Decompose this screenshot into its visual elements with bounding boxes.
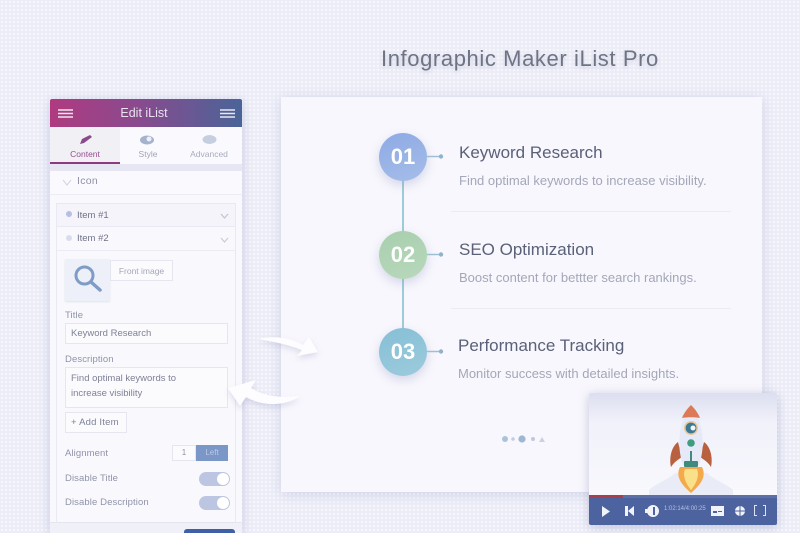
- chevron: [62, 180, 72, 186]
- editor title: Edit iList: [120, 106, 168, 120]
- description 02: Boost content for bettter search rankings.: [459, 270, 697, 285]
- toggle: [199, 472, 230, 486]
- icon: magnifier: [74, 266, 102, 292]
- add item button: + Add Item: [71, 417, 119, 428]
- connector dot 03: [427, 349, 444, 354]
- title field: Keyword Research: [71, 328, 151, 339]
- arrow: to editor: [228, 380, 296, 408]
- play icon: [602, 506, 610, 517]
- globe icon: [735, 506, 745, 516]
- menu icon right: [220, 109, 235, 118]
- time code: 1:02:14/4:00:25: [664, 506, 706, 512]
- description field: Find optimal keywords to: [71, 373, 176, 384]
- image thumbnail: [65, 259, 110, 301]
- rocket illustration: [649, 405, 733, 495]
- badge 02: [379, 231, 427, 279]
- alignment value: 1: [182, 448, 186, 457]
- skip icon: [625, 506, 634, 516]
- chevron: [220, 238, 228, 243]
- description label: Description: [65, 354, 114, 365]
- advanced label: Advanced: [190, 149, 228, 159]
- badge 01: [379, 133, 427, 181]
- chevron: [220, 214, 228, 219]
- front image button: Front image: [119, 266, 164, 276]
- style icon: [140, 136, 154, 144]
- item label: Item #1: [77, 210, 109, 221]
- badge 02: 02: [391, 242, 415, 267]
- step 03: [376, 328, 679, 384]
- controls bar: [589, 498, 777, 525]
- title: Infographic Maker iList Pro: [381, 46, 659, 71]
- panel: infographic preview: [281, 97, 762, 492]
- menu icon left: [58, 109, 73, 118]
- strip: [50, 164, 242, 171]
- content label: Content: [70, 149, 100, 159]
- tab: advanced: [190, 135, 228, 159]
- disable description label: Disable Description: [65, 497, 149, 508]
- heading 01: Keyword Research: [459, 143, 603, 162]
- volume icon: [645, 505, 659, 517]
- progress fill: [589, 495, 623, 499]
- tab: content: [50, 127, 120, 164]
- content icon: [80, 135, 92, 144]
- connector dot 02: [427, 252, 444, 257]
- tab: style: [139, 136, 158, 159]
- fullscreen icon: [754, 505, 766, 516]
- item 2 editor: [56, 226, 236, 533]
- alignment left button: [196, 445, 228, 461]
- alignment left button: Left: [205, 448, 219, 457]
- divider: [57, 250, 235, 251]
- description 03: Monitor success with detailed insights.: [458, 366, 679, 381]
- icon section: [50, 171, 242, 195]
- section label: Icon: [77, 175, 98, 187]
- toggle: [199, 496, 230, 510]
- arrow: to preview: [260, 338, 318, 360]
- bullet: [66, 235, 72, 241]
- badge 03: 03: [391, 339, 415, 364]
- alignment label: Alignment: [65, 448, 108, 459]
- title field: [65, 323, 228, 344]
- divider 2: [451, 308, 731, 309]
- pagination dots: [502, 435, 545, 443]
- editor header: [50, 99, 242, 127]
- advanced icon: [202, 135, 216, 144]
- badge 01: 01: [391, 144, 415, 169]
- step 01: [376, 133, 707, 188]
- panel: editor sidebar: [50, 99, 242, 533]
- title label: Title: [65, 310, 83, 321]
- connector dot 01: [427, 154, 444, 159]
- style label: Style: [139, 149, 157, 159]
- captions icon: [711, 506, 724, 516]
- bullet: [66, 211, 72, 217]
- alignment value: [172, 445, 196, 461]
- divider 1: [451, 211, 731, 212]
- video player: [589, 393, 777, 525]
- description field: increase visibility: [71, 388, 142, 398]
- item 1 row: [56, 203, 236, 227]
- add item button: [65, 412, 127, 433]
- step 02: [376, 231, 697, 286]
- heading 02: SEO Optimization: [459, 240, 594, 259]
- item label: Item #2: [77, 233, 109, 244]
- alignment control: [172, 445, 228, 461]
- description 01: Find optimal keywords to increase visibility.: [459, 173, 707, 188]
- badge 03: [379, 328, 427, 376]
- connector line: [402, 157, 404, 367]
- footer strip: [50, 522, 242, 533]
- video sky: [589, 393, 777, 495]
- progress bar: [589, 495, 777, 499]
- disable title label: Disable Title: [65, 473, 118, 484]
- save button: [184, 529, 235, 533]
- heading 03: Performance Tracking: [458, 336, 624, 355]
- front image button: [110, 260, 173, 281]
- description field: [65, 367, 228, 408]
- tabs: [50, 127, 242, 164]
